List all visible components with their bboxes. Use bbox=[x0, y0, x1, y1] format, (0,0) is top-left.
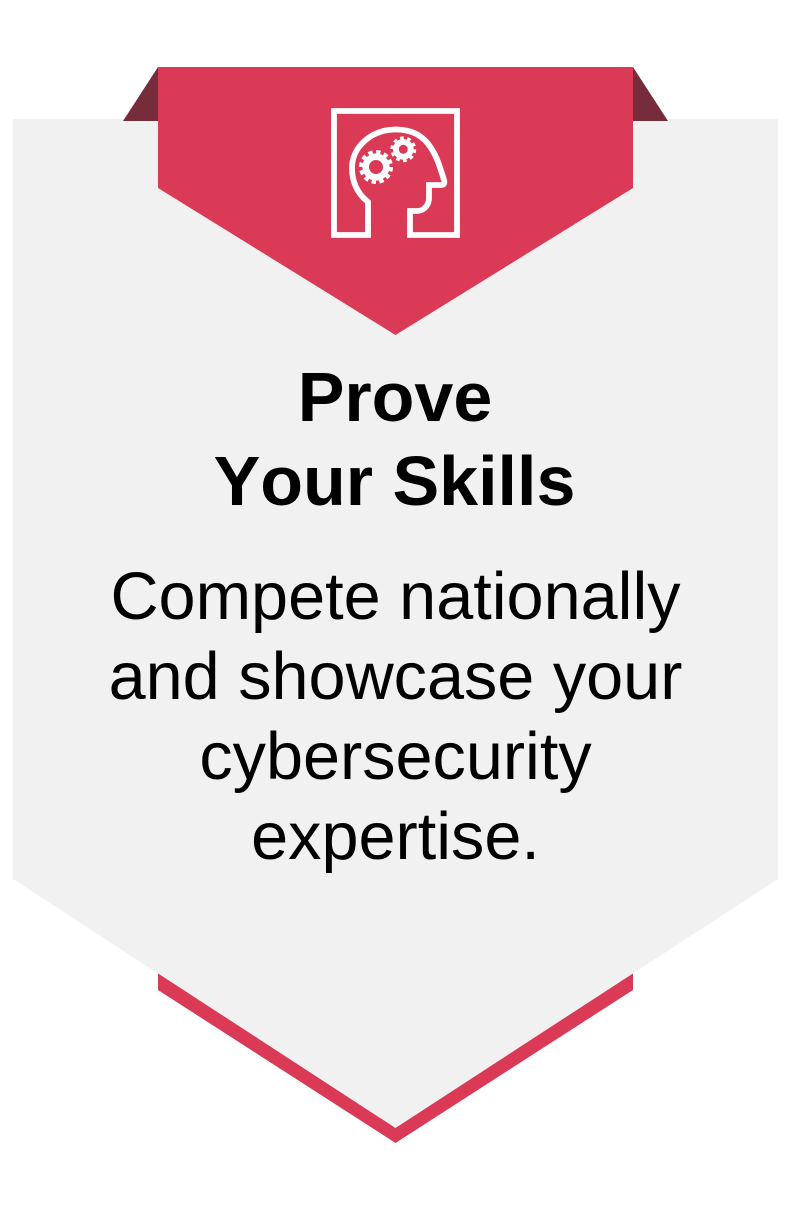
heading: Prove bbox=[298, 358, 492, 436]
icon frame and head outline bbox=[334, 111, 457, 235]
heading: Your Skills bbox=[214, 442, 575, 520]
body text: and showcase your bbox=[109, 640, 682, 714]
heading bbox=[214, 358, 575, 520]
icon: small gear bbox=[392, 138, 414, 160]
body text: expertise. bbox=[251, 800, 540, 874]
body text: cybersecurity bbox=[199, 720, 592, 794]
icon: head with gears bbox=[334, 111, 457, 235]
ribbon fold: right bbox=[633, 67, 668, 121]
bottom chevron accent bbox=[158, 900, 633, 1143]
body text: Compete nationally bbox=[110, 560, 681, 634]
body text bbox=[109, 560, 682, 874]
ribbon fold: left bbox=[123, 67, 158, 121]
red banner bbox=[158, 67, 633, 335]
icon: large gear bbox=[361, 152, 391, 182]
